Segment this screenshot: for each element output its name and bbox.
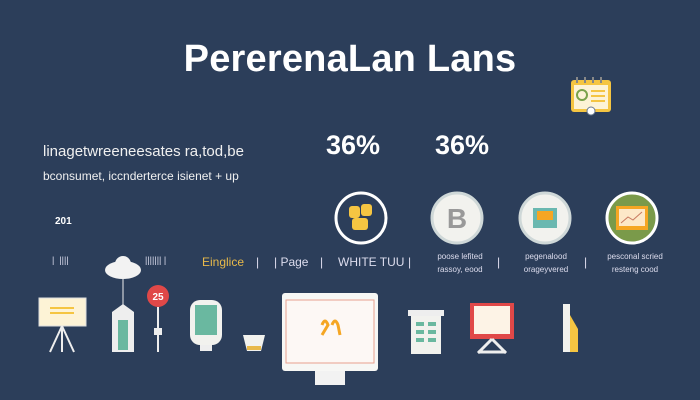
icon: cloud tower [105, 256, 141, 352]
bottom icons [38, 256, 578, 385]
text block: intro [43, 143, 244, 183]
label row: | [408, 255, 411, 269]
icon: 25 badge: 25 [152, 292, 164, 303]
label row: | |||| [52, 255, 69, 265]
label row: | [256, 255, 259, 269]
label row: Einglice [202, 255, 244, 269]
icon: building [408, 310, 444, 354]
text block: intro: bconsumet, iccnderterce isienet + up [43, 169, 239, 183]
label row: | [584, 255, 587, 269]
icon: bitcoin [432, 193, 482, 243]
icon: inbox [520, 193, 570, 243]
label row: orageyvered [524, 265, 568, 274]
icon: yellow shape [563, 304, 578, 352]
icon: chart board [607, 193, 657, 243]
title: PererenaLan Lans [184, 38, 516, 80]
icon: bitcoin: B [447, 203, 467, 234]
label row: | [497, 255, 500, 269]
label row: WHITE TUU [338, 255, 404, 269]
icon: kiosk [190, 300, 222, 351]
icon: monitor [282, 293, 378, 385]
label row [52, 252, 663, 274]
label row: | [320, 255, 323, 269]
label row: rassoy, eood [437, 265, 483, 274]
icon: 25 badge [147, 285, 169, 352]
icon: easel [39, 298, 86, 352]
label row: poose lefited [437, 252, 483, 261]
label row: resteng cood [612, 265, 658, 274]
label: 201: 201 [55, 216, 72, 227]
icon: red board [470, 303, 514, 353]
label row: ||||||| | [145, 255, 166, 265]
icon: coins [336, 193, 386, 243]
text block: intro: linagetwreeneesates ra,tod,be [43, 143, 244, 160]
label row: pesconal scried [607, 252, 663, 261]
icon: coffee [243, 335, 265, 351]
label row: pegenalood [525, 252, 567, 261]
icon: calendar [571, 77, 611, 116]
label row: | Page [274, 255, 308, 269]
stat: 36%: 36% [326, 130, 380, 160]
stat: 36% second: 36% [435, 130, 489, 160]
icon row: circles [334, 192, 658, 244]
